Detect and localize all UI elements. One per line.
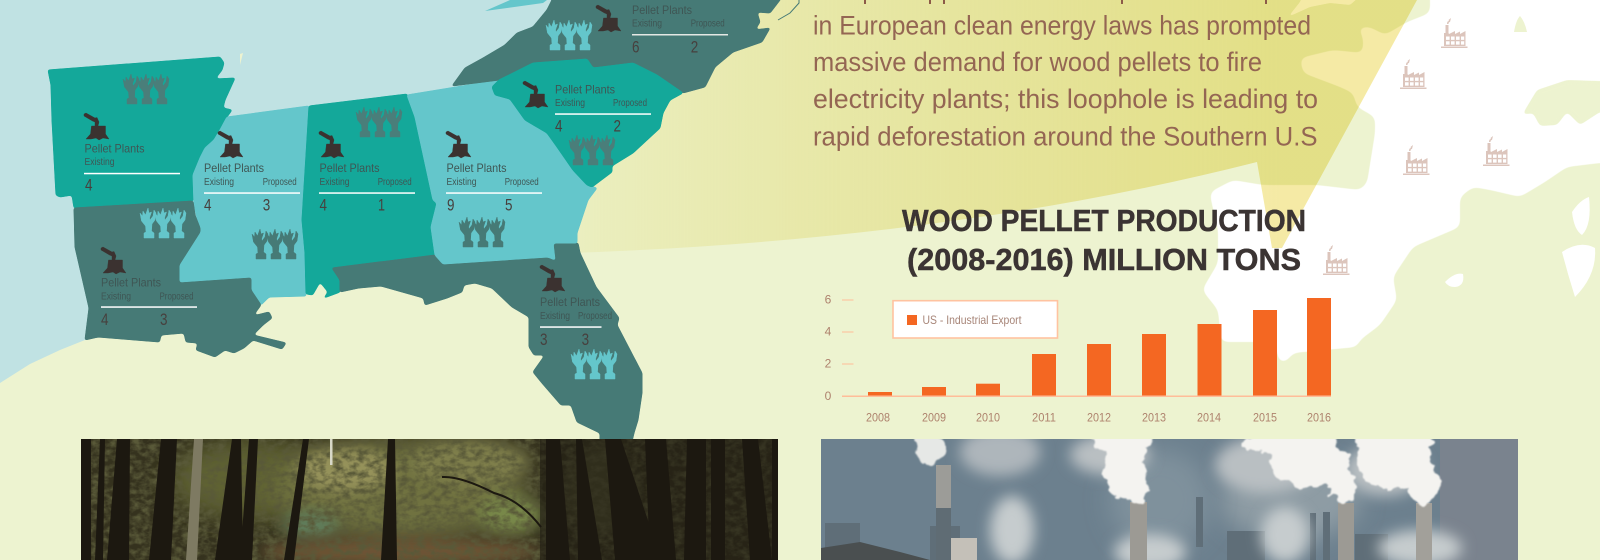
label: pellet plants: Pellet Plants [555, 82, 615, 96]
y axis labels [825, 292, 832, 403]
factory icons over Europe [1323, 18, 1510, 275]
label: existing: Existing [320, 177, 350, 188]
label: proposed: Proposed [691, 19, 725, 30]
icon: dead trees [252, 229, 298, 259]
icon: dead trees [123, 74, 169, 104]
label: proposed: Proposed [160, 291, 194, 302]
icon: dead trees [546, 20, 592, 50]
label: proposed: Proposed [578, 311, 612, 322]
panel: Georgia [407, 80, 597, 264]
small land sliver [240, 53, 243, 65]
text block: loophole explanation: rapid deforestation around the Southern U.S [813, 122, 1318, 152]
icon: stump and axe [101, 247, 126, 274]
x axis labels [866, 411, 1331, 425]
label: existing: Existing [555, 98, 585, 109]
number: proposed plants: 5 [505, 196, 512, 215]
x axis labels: 2011 [1032, 411, 1056, 425]
icon: stump and axe [596, 5, 621, 32]
number: existing plants: 9 [447, 196, 454, 215]
number: proposed plants: 1 [378, 196, 385, 215]
panel: Louisiana [74, 201, 286, 357]
icon: dead trees [571, 349, 617, 379]
icon: factory [1400, 59, 1426, 89]
bars [868, 298, 1331, 396]
number: existing plants: 4 [204, 196, 212, 215]
panel: South Carolina [492, 59, 683, 187]
number: existing plants: 3 [540, 330, 548, 349]
text block: loophole explanation: electricity plants; this loophole is leading to [813, 84, 1318, 114]
panel: Alabama [302, 94, 437, 298]
icon: stump and axe [523, 81, 548, 108]
chimneys [936, 465, 1432, 560]
yellow spotlight beam from the South to Europe [570, 0, 1417, 253]
number: existing plants: 4 [320, 196, 327, 215]
background: gulf and interior water [0, 0, 560, 383]
icon: factory [1441, 18, 1468, 48]
label: existing: Existing [101, 291, 131, 302]
icon: factory [1323, 245, 1350, 275]
water sliver near North Carolina [485, 0, 547, 11]
photo: southern cypress forest [81, 439, 778, 560]
number: existing plants: 6 [632, 37, 640, 56]
label: pellet plants: Pellet Plants [446, 161, 506, 175]
icon: dead trees [569, 135, 615, 165]
label: pellet plants: Pellet Plants [632, 3, 692, 17]
label: pellet plants: Pellet Plants [204, 161, 264, 175]
label: pellet plants: Pellet Plants [101, 276, 161, 290]
y axis labels: 2 [825, 356, 832, 370]
number: proposed plants: 2 [691, 37, 698, 56]
text block: loophole explanation [813, 0, 1318, 152]
label: existing: Existing [446, 177, 476, 188]
legend [893, 301, 1058, 338]
label: existing: Existing [84, 157, 114, 168]
bar chart: wood pellet production [825, 292, 1331, 425]
legend: US - Industrial Export [922, 313, 1022, 327]
icon: factory [1483, 136, 1510, 166]
icon: dead trees [356, 107, 402, 137]
chart title: (2008-2016) MILLION TONS [907, 242, 1301, 277]
x axis labels: 2009 [922, 411, 946, 425]
icon: stump and axe [446, 131, 471, 158]
panel: Florida [332, 243, 642, 450]
number: proposed plants: 3 [582, 330, 589, 349]
label: existing: Existing [540, 311, 570, 322]
number: proposed plants: 3 [263, 196, 270, 215]
chart title [902, 203, 1306, 277]
panel: Mississippi [179, 106, 309, 305]
number: proposed plants: 2 [614, 117, 621, 136]
x axis labels: 2008 [866, 411, 890, 425]
distant towers [825, 497, 1388, 560]
icon: stump and axe [319, 131, 344, 158]
label: existing: Existing [632, 19, 662, 30]
soft smoke halos [1070, 435, 1425, 496]
y axis labels: 6 [825, 292, 832, 306]
icon: dead trees [140, 208, 186, 238]
x axis labels: 2012 [1087, 411, 1111, 425]
photo: power plant smoke stacks [821, 428, 1518, 560]
background: atlantic ocean with landmasses [1202, 0, 1600, 362]
x axis labels: 2013 [1142, 411, 1166, 425]
label: proposed: Proposed [613, 98, 647, 109]
label: pellet plants: Pellet Plants [320, 161, 380, 175]
panel: North Carolina [452, 0, 799, 93]
y axis labels: 0 [825, 389, 832, 403]
text block: loophole explanation: massive demand for wood pellets to fire [813, 47, 1262, 77]
icon: stump and axe [84, 113, 109, 140]
label: proposed: Proposed [505, 177, 539, 188]
icon: stump and axe [218, 131, 243, 158]
panel: Arkansas [48, 57, 235, 208]
x axis labels: 2014 [1197, 411, 1221, 425]
label: pellet plants: Pellet Plants [84, 142, 144, 156]
number: existing plants: 4 [85, 176, 92, 195]
icon: stump and axe [540, 265, 565, 292]
number: existing plants: 4 [555, 117, 562, 136]
outer banks [778, 0, 799, 20]
chart title: WOOD PELLET PRODUCTION [902, 203, 1306, 238]
label: pellet plants: Pellet Plants [540, 295, 600, 309]
x axis labels: 2016 [1307, 411, 1331, 425]
label: existing: Existing [204, 177, 234, 188]
label: proposed: Proposed [263, 177, 297, 188]
smoke plumes [915, 428, 1440, 504]
number: proposed plants: 3 [160, 310, 168, 329]
text block: loophole explanation: in European clean energy laws has prompted [813, 10, 1311, 40]
x axis labels: 2010 [976, 411, 1000, 425]
x axis labels: 2015 [1253, 411, 1277, 425]
lower smoke [990, 496, 1462, 560]
label: proposed: Proposed [378, 177, 412, 188]
icon: dead trees [459, 217, 505, 247]
icon: factory [1403, 145, 1430, 175]
number: existing plants: 4 [101, 310, 108, 329]
y axis labels: 4 [825, 324, 832, 338]
